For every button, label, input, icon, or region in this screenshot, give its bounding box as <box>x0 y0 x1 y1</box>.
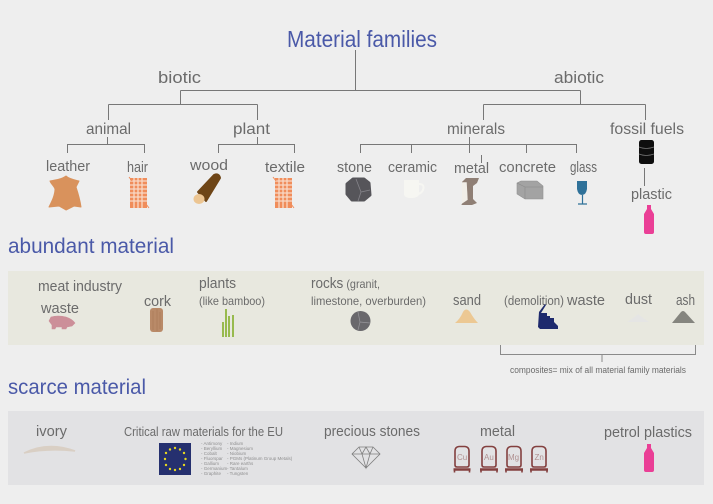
icon: diamond <box>352 447 380 468</box>
label: plastic: plastic <box>631 186 672 203</box>
icon: wine glass <box>577 181 587 204</box>
label: plant: plant <box>233 121 271 138</box>
list: raw materials column 2: - Rare earths <box>227 461 254 466</box>
icon: ceramic cup <box>404 180 424 198</box>
list: raw materials column 2 <box>227 441 293 476</box>
composites note: composites= mix of all material family materials <box>510 365 686 375</box>
label: waste: waste <box>566 292 605 309</box>
label: metal: metal <box>480 423 515 440</box>
label: sand: sand <box>453 292 481 309</box>
panel: scarce material <box>8 411 704 485</box>
labels: metal symbols: Zn <box>534 453 544 462</box>
icon: EU flag <box>159 443 191 475</box>
list: raw materials column 2: - Niobium <box>227 451 247 456</box>
heading: scarce material: scarce material <box>8 376 146 399</box>
icon: demolition rubble <box>538 304 558 329</box>
label: animal: animal <box>86 121 131 138</box>
icon: ash pile <box>672 311 695 323</box>
label: leather: leather <box>46 158 90 175</box>
label: hair: hair <box>127 159 148 176</box>
label: demolition: (demolition) <box>504 293 564 308</box>
list: raw materials column 2: - Tungsten <box>227 471 249 476</box>
composites bracket <box>500 345 696 362</box>
label: abiotic: abiotic <box>554 68 605 87</box>
list: raw materials column 1: - Fluorspar <box>201 456 223 461</box>
container: Zn <box>530 446 548 472</box>
label: limestone overburden: limestone, overburden) <box>311 294 426 308</box>
list: raw materials column 2: - Indium <box>227 441 244 446</box>
heading: abundant material: abundant material <box>8 235 174 258</box>
label: waste: waste <box>40 300 79 317</box>
icon: hair weave <box>129 177 149 208</box>
icon: bamboo <box>223 309 233 337</box>
label: wood: wood <box>189 157 228 174</box>
icon: ivory tusk <box>24 446 75 453</box>
list: raw materials column 1 <box>201 441 228 476</box>
list: raw materials column 1: - Cobalt <box>201 451 218 456</box>
list: raw materials column 2: - Magnesium <box>227 446 253 451</box>
label: glass: glass <box>570 159 597 176</box>
label: ceramic: ceramic <box>388 159 437 176</box>
label: stone: stone <box>337 159 372 176</box>
icon: leather hide <box>49 176 81 210</box>
list: raw materials column 2: - Tantalum <box>227 466 248 471</box>
list: raw materials column 1: - Beryllium <box>201 446 223 451</box>
list: raw materials column 1: - Antimony <box>201 441 223 446</box>
label: petrol plastics: petrol plastics <box>604 424 692 441</box>
icon: sand pile <box>455 310 478 323</box>
labels: metal symbols <box>457 453 544 462</box>
icon: oil barrel <box>639 140 654 164</box>
label: cork: cork <box>144 293 171 310</box>
container: Au <box>480 446 498 472</box>
container: Mg <box>505 446 523 472</box>
list: raw materials column 2: - PGMs (Platinum Group Metals) <box>227 456 293 461</box>
icon: concrete block <box>517 181 543 199</box>
list: raw materials column 1: - Graphite <box>201 471 222 476</box>
label: fossil fuels: fossil fuels <box>610 121 684 138</box>
list: raw materials column 1: - Gallium <box>201 461 219 466</box>
label: like bamboo: (like bamboo) <box>199 294 265 308</box>
family tree connector lines <box>68 50 646 186</box>
label: plants: plants <box>199 275 236 292</box>
label: minerals: minerals <box>447 121 505 138</box>
icon: wood log <box>194 174 220 204</box>
icon: plastic bottle <box>644 205 654 234</box>
icon: pig <box>49 316 75 329</box>
container: Cu <box>454 446 470 472</box>
icon: stone <box>347 179 370 201</box>
panel: abundant material <box>8 271 704 345</box>
label: biotic: biotic <box>158 68 202 87</box>
labels: metal symbols: Au <box>484 453 494 462</box>
label: critical raw materials: Critical raw materials for the EU <box>124 424 283 439</box>
icon: metal containers <box>454 446 548 472</box>
icon: rock <box>350 311 370 331</box>
label: dust: dust <box>625 291 653 308</box>
label: precious stones: precious stones <box>324 423 420 440</box>
icon: dust pile <box>627 314 649 322</box>
labels: metal symbols: Mg <box>508 453 519 462</box>
label: textile: textile <box>265 159 305 176</box>
label: metal: metal <box>454 160 489 177</box>
list: raw materials column 1: - Germanium <box>201 466 228 471</box>
icon: cork <box>150 308 163 332</box>
icon: plastic bottle <box>644 444 654 472</box>
label: ash: ash <box>676 292 695 309</box>
label: rocks granit: rocks (granit, <box>311 275 380 292</box>
label: meat industry: meat industry <box>38 278 122 295</box>
label: concrete: concrete <box>499 159 556 176</box>
title: Material families <box>287 26 437 52</box>
labels: metal symbols: Cu <box>457 453 467 462</box>
icon: metal I-beam <box>461 178 479 205</box>
label: ivory: ivory <box>36 423 67 440</box>
icon: textile weave <box>273 177 294 208</box>
